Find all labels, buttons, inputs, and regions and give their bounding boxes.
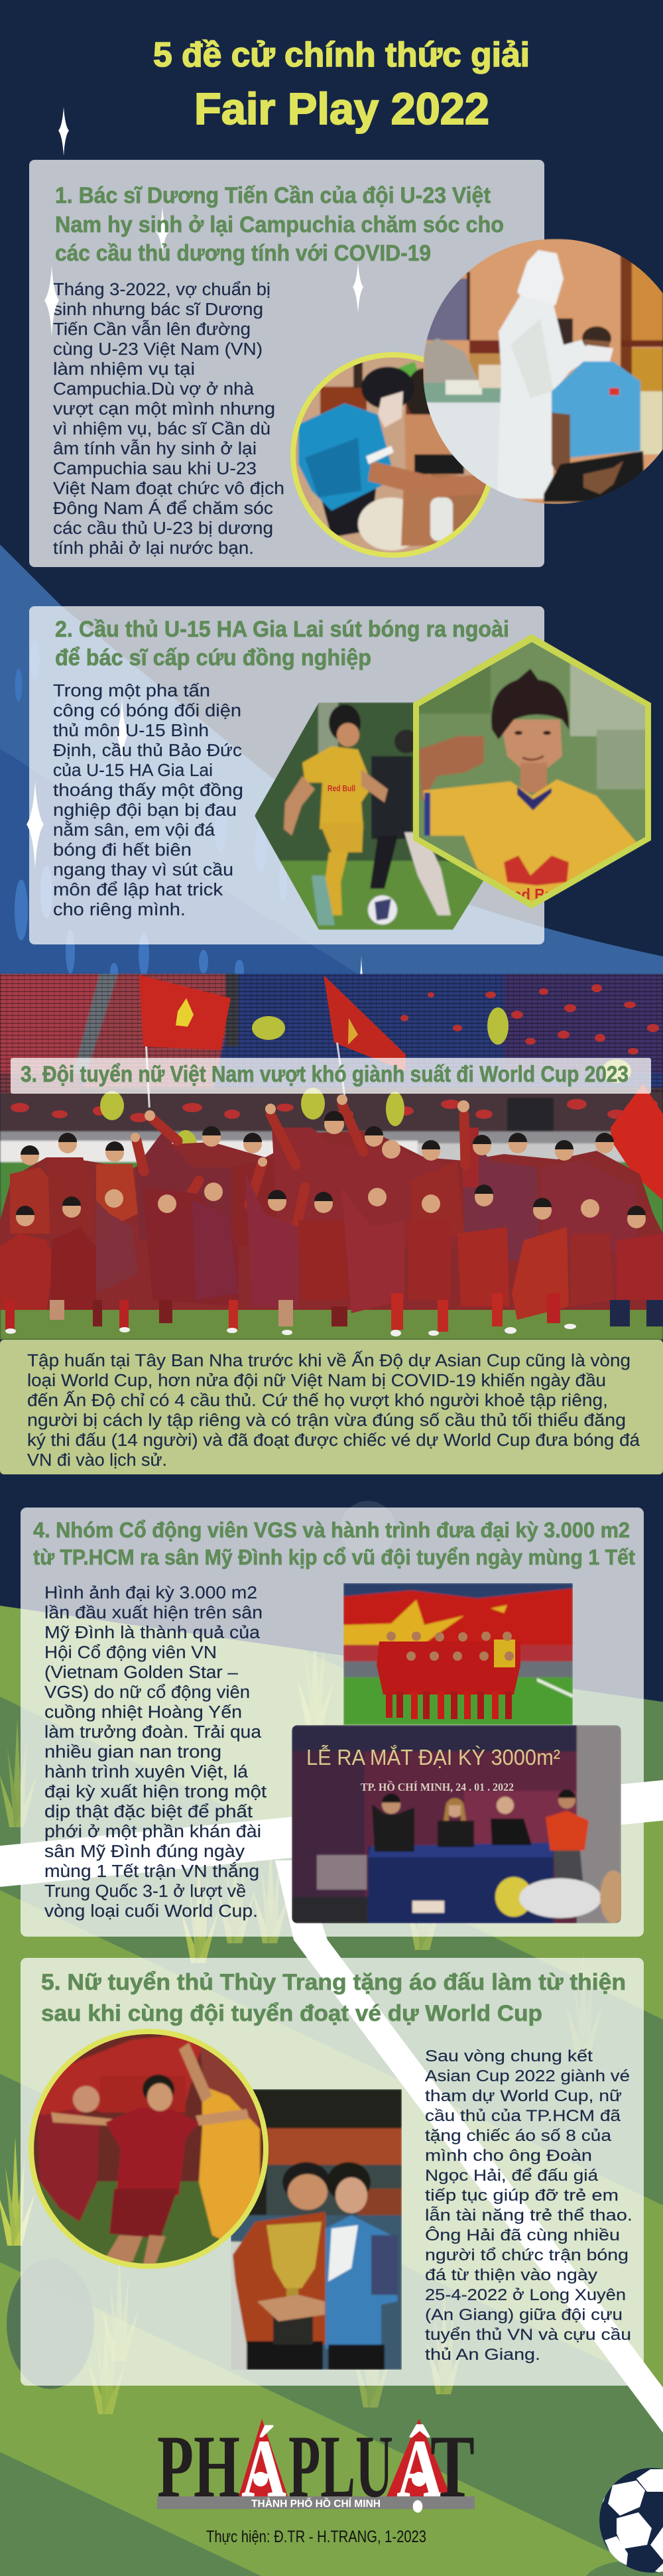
football base <box>599 2468 663 2573</box>
panel 5 background <box>21 1958 644 2386</box>
team shoes <box>5 1324 576 1336</box>
panel 4: supporters <box>21 1508 644 1937</box>
panel 5 heading <box>41 1970 626 2026</box>
panel 2 heading: 2. Cầu thủ U-15 HA Gia Lai sút bóng ra ngoài <box>55 617 509 642</box>
panel 4 body text: phới ở một phần khán đài <box>44 1823 261 1841</box>
panel 4 body text: Trung Quốc 3-1 ở lượt về <box>44 1882 246 1901</box>
panel 3 body text: loại World Cup, hơn nửa đội nữ Việt Nam bị COVID-19 khiến ngày đầu <box>27 1372 606 1390</box>
sparkle: left of panel 1 body <box>44 265 59 337</box>
panel 1 body text: Tiến Cần vẫn lên đường <box>53 320 251 339</box>
panel 5 body text: Asian Cup 2022 giành vé <box>425 2067 630 2085</box>
panel 3 body text: Tập huấn tại Tây Ban Nha trước khi về Ấn Độ dự Asian Cup cũng là vòng <box>27 1351 631 1370</box>
football white panels <box>602 2469 663 2573</box>
stadium stands <box>0 974 663 1340</box>
team hair <box>16 1111 646 1215</box>
photo: player running (hexagon) <box>255 702 483 930</box>
photo: national team with giant flag <box>343 1583 573 1725</box>
panel 1 heading <box>55 183 504 266</box>
panel 2 body text: thoáng thấy một đồng <box>53 781 243 800</box>
photo scene <box>296 357 487 552</box>
banner text: TP. HỒ CHÍ MINH, 24 . 01 . 2022 <box>361 1780 514 1793</box>
panel 1 body text: tính phải ở lại nước bạn. <box>53 539 254 558</box>
panel 4 body text: VGS) do nữ cổ động viên <box>44 1683 250 1702</box>
panel 5 body text: người tổ chức trận bóng <box>425 2246 629 2264</box>
panel 5 body text: tham dự World Cup, nữ <box>425 2087 622 2105</box>
yellow ring <box>29 2029 269 2269</box>
panel 4 body text: Mỹ Đình là thành quả của <box>44 1624 261 1642</box>
photo: women's team player celebrating (ring circle) <box>29 2029 269 2269</box>
logo white accented letters: Ậ <box>396 2423 443 2515</box>
panel 4 heading: từ TP.HCM ra sân Mỹ Đình kịp cổ vũ đội tuyển ngày mùng 1 Tết <box>33 1545 635 1569</box>
logo white accented letters <box>241 2423 443 2515</box>
title: 5 đề cử chính thức giải <box>153 36 530 74</box>
title: Fair Play 2022 <box>194 84 489 134</box>
panel 5 body text: mình cho ông Đoàn <box>425 2147 592 2165</box>
panel 5 heading: 5. Nữ tuyển thủ Thùy Trang tặng áo đấu làm từ thiện <box>41 1970 626 1995</box>
panel 5 body text: đá từ thiện vào ngày <box>425 2266 597 2284</box>
photo: doctor treating player (ring circle) <box>290 352 497 564</box>
panel 2 body text: cho riêng mình. <box>53 901 186 919</box>
team back row <box>10 1127 636 1260</box>
panel 5: Thuy Trang <box>21 1958 644 2386</box>
photo: player portrait (hexagon with border) <box>411 634 656 913</box>
photo: COVID test (big circle) <box>423 239 663 504</box>
panel 1 body text: Tháng 3-2022, vợ chuẩn bị <box>53 281 271 299</box>
panel 3 body text: người bị cách ly tập riêng và có trận vừa đúng số cầu thủ tối thiểu đăng <box>27 1411 626 1430</box>
panel 2 body text: nằm sân, em vội đá <box>53 820 215 840</box>
panel 1 background <box>29 160 544 567</box>
panel 1 heading: Nam hy sinh ở lại Campuchia chăm sóc cho <box>55 212 504 237</box>
logo subtitle: THÀNH PHỐ HỒ CHÍ MINH <box>251 2496 381 2510</box>
yellow ring <box>290 352 496 558</box>
panel 5 heading: sau khi cùng đội tuyển đoạt vé dự World Cup <box>41 2001 542 2026</box>
photo: Thuy Trang and trophy <box>231 2089 402 2370</box>
panel 4 heading: 4. Nhóm Cổ động viên VGS và hành trình đưa đại kỳ 3.000 m2 <box>33 1518 630 1542</box>
panel 5 body text: cầu thủ của TP.HCM đã <box>425 2107 621 2125</box>
panel 4 heading <box>33 1518 635 1569</box>
logo dots inside A <box>253 2472 426 2486</box>
team mass <box>0 1131 663 1310</box>
stand seat texture <box>0 974 663 1093</box>
logo black letters: PH <box>157 2417 240 2516</box>
panel 3 body text: đến Ấn Độ chỉ có 4 cầu thủ. Cứ thế họ vượt khó người khoẻ tập riêng, <box>27 1391 608 1410</box>
panel 4 body text: (Vietnam Golden Star – <box>44 1663 239 1682</box>
panel 1 body text: vì nhiệm vụ, bác sĩ Cần dù <box>53 420 271 438</box>
panel 2 body text: Định, cầu thủ Bảo Đức <box>53 741 242 760</box>
panel 2 heading <box>55 617 509 671</box>
sparkle under panel 1 <box>156 206 169 259</box>
sparkle: panel 1 centre <box>353 262 363 314</box>
icon: football <box>599 2468 663 2573</box>
background: dark green stripes <box>0 1506 663 2576</box>
panel 5 body text: Ngọc Hải, để đấu giá <box>425 2167 599 2185</box>
panel 4 body text: đại kỳ xuất hiện trong một <box>44 1783 267 1801</box>
portrait jersey text: Red Bull <box>503 885 562 905</box>
logo black letters <box>157 2417 475 2516</box>
panel 5 body text: tặng chiếc áo số 8 của <box>425 2127 612 2145</box>
panel 3 body text: ký thi đấu (14 người) và đã đoạt được chiếc vé dự World Cup đưa bóng đá <box>27 1431 640 1450</box>
banner text: LỄ RA MẮT ĐẠI KỲ 3000m² <box>306 1745 560 1770</box>
logo: Pháp Luật <box>157 2417 475 2516</box>
title bar background <box>11 1058 651 1094</box>
panel 1 body text: cùng U-23 Việt Nam (VN) <box>53 340 263 359</box>
background: light green field <box>0 1592 663 2576</box>
background: darker blue wedge <box>0 749 359 975</box>
panel 1 body text: Đông Nam Á để chăm sóc <box>53 499 273 518</box>
panel 1 heading: các cầu thủ dương tính với COVID-19 <box>55 241 431 266</box>
panel 1 body text: làm nhiệm vụ tại <box>53 360 195 379</box>
panel 2 background <box>29 606 544 944</box>
panel 1 heading: 1. Bác sĩ Dương Tiến Cần của đội U-23 Việt <box>55 183 491 208</box>
panel 5 body text: (An Giang) giữa đội cựu <box>425 2306 623 2324</box>
background: navy top <box>0 0 663 1724</box>
panel 5 body text: Sau vòng chung kết <box>425 2047 593 2065</box>
background: navy wedge over field <box>0 0 663 1702</box>
background: dark oval <box>7 2259 94 2389</box>
panel 1 body text: các cầu thủ U-23 bị dương <box>53 519 273 538</box>
panel 2 body text: của U-15 HA Gia Lai <box>53 761 213 780</box>
panel 2 body text: nghiệp đội bạn bị đau <box>53 801 237 820</box>
panel 4 background <box>21 1508 644 1937</box>
background: blue ovals <box>15 641 287 980</box>
panel 5 body text: lẫn tài năng trẻ thể thao. <box>425 2207 633 2224</box>
background: faint circle on navy <box>340 1501 396 1557</box>
panel 2 body text: môn để lập hat trick <box>53 881 223 899</box>
panel 2 body text: thủ môn U-15 Bình <box>53 722 209 740</box>
thrown sunflowers <box>100 1007 631 1143</box>
panel 5 body text: thủ An Giang. <box>425 2346 540 2364</box>
panel 4 body text: làm trưởng đoàn. Trải qua <box>44 1723 262 1742</box>
flags <box>139 975 663 1200</box>
panel 1 body text <box>53 281 284 558</box>
team heads <box>16 1114 646 1228</box>
panel 1 body text: âm tính vẫn hy sinh ở lại <box>53 439 257 458</box>
jersey text: Red Bull <box>328 783 355 793</box>
panel 5 body text <box>425 2047 633 2364</box>
hexagon border <box>413 634 651 909</box>
portrait scene <box>419 642 645 901</box>
panel 1 body text: Campuchia sau khi U-23 <box>53 460 257 478</box>
panel 4 body text: mùng 1 Tết trận VN thắng <box>44 1862 259 1881</box>
panel 1 body text: vượt cạn một mình nhưng <box>53 400 275 419</box>
panel 5 body text: 25-4-2022 ở Long Xuyên <box>425 2286 626 2304</box>
team photo <box>0 974 663 1340</box>
logo black letters: T <box>430 2417 475 2516</box>
panel 3 background <box>0 1340 663 1474</box>
panel 3 body text: VN đi vào lịch sử. <box>27 1451 167 1470</box>
panel 2: U-15 player <box>29 606 544 944</box>
sparkle: top left <box>58 107 69 156</box>
team front row <box>0 1174 663 1320</box>
sparkle: left of panel 2 <box>27 781 44 868</box>
background: white pitch lines <box>0 1780 663 2433</box>
panel 2 body text <box>53 682 243 919</box>
panel 4 body text: cuồng nhiệt Hoàng Yến <box>44 1703 242 1722</box>
panel 2 body text: ngang thay vì sút cầu <box>53 861 233 879</box>
panel 1 body text: Việt Nam đoạt chức vô địch <box>53 480 284 498</box>
panel 1 body text: Campuchia.Dù vợ ở nhà <box>53 380 255 399</box>
panel 4 body text: vòng loại cuối World Cup. <box>44 1902 258 1921</box>
logo black letters: PLU <box>288 2417 393 2516</box>
background: blue wave <box>0 545 663 975</box>
credit line: Thực hiện: Đ.TR - H.TRANG, 1-2023 <box>206 2528 426 2546</box>
panel 5 body text: tiếp tục giúp đỡ trẻ em <box>425 2187 619 2205</box>
panel 2 body text: công có bóng đối diện <box>53 702 241 720</box>
team raised arms <box>137 1104 465 1234</box>
panel 2 body text: bóng đi hết biên <box>53 841 192 860</box>
panel 2 heading: để bác sĩ cấp cứu đồng nghiệp <box>55 645 371 671</box>
team players <box>377 1632 520 1719</box>
ball shadow <box>583 2560 663 2576</box>
panel 1: doctor <box>29 160 544 567</box>
panel 3 body text <box>27 1351 640 1470</box>
team legs <box>5 1293 663 1332</box>
sparkle under panel 2 <box>115 698 129 766</box>
panel 4 body text: nhiều gian nan trong <box>44 1743 221 1762</box>
panel 4 body text: sân Mỹ Đình đúng ngày <box>44 1842 245 1861</box>
panel 4 body text: Hội Cổ động viên VN <box>44 1643 217 1662</box>
crowd speckle <box>11 984 659 1122</box>
panel 5 body text: Ông Hải đã cùng nhiều <box>425 2226 620 2244</box>
photo: flag launch event <box>292 1725 627 1923</box>
panel 3 title bar <box>11 1058 651 1094</box>
logo white accented letters: Á <box>241 2423 286 2515</box>
circle photo scene <box>33 2029 265 2268</box>
sparkle: above team photo <box>357 955 366 988</box>
logo red triangles <box>239 2419 451 2496</box>
panel 1 body text: sinh nhưng bác sĩ Dương <box>53 300 263 319</box>
banner text <box>306 1745 560 1793</box>
panel 5 body text: tuyển thủ VN và cựu cầu <box>425 2326 631 2344</box>
panel 4 body text: Hình ảnh đại kỳ 3.000 m2 <box>44 1584 257 1602</box>
background: grass tufts <box>0 1622 603 2414</box>
team hands <box>131 1094 469 1167</box>
title <box>153 36 530 134</box>
panel 4 body text: dịp thật đặc biệt để phất <box>44 1803 253 1821</box>
panel 4 body text: hành trình xuyên Việt, lá <box>44 1763 249 1781</box>
logo grey bar <box>157 2496 475 2509</box>
panel 2 body text: Trong một pha tấn <box>53 682 210 700</box>
panel 4 body text <box>44 1584 267 1921</box>
panel 4 body text: lần đầu xuất hiện trên sân <box>44 1604 263 1622</box>
panel 3 text box <box>0 1340 663 1474</box>
